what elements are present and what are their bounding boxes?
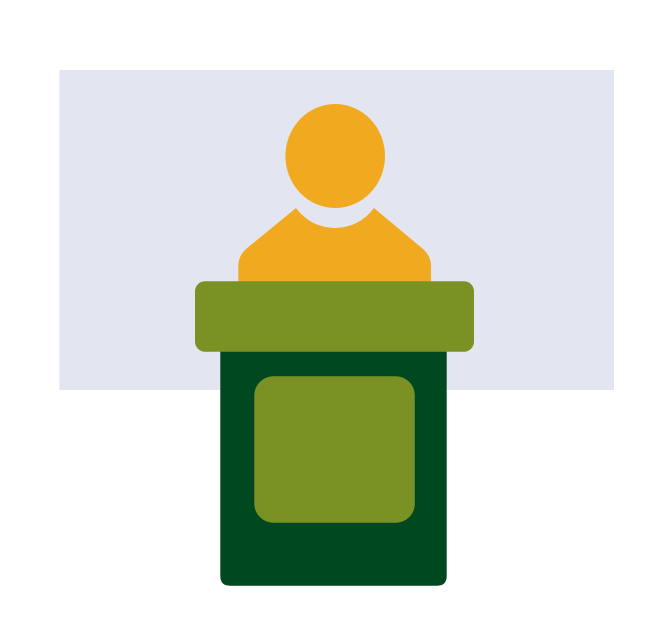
icon: podium [195, 281, 474, 586]
speaker head [285, 104, 385, 208]
podium panel [254, 376, 415, 523]
background panel [59, 70, 614, 390]
podium base [220, 345, 447, 586]
podium top [195, 281, 474, 352]
icon: speaker [238, 104, 431, 290]
speaker body [238, 208, 431, 290]
